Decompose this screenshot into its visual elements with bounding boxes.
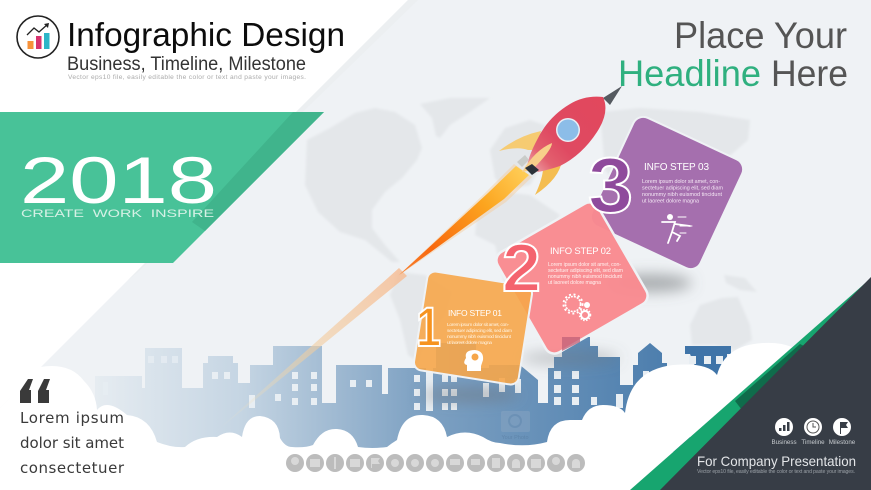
Africa <box>475 192 560 285</box>
step 01 body: Lorem ipsum dolor sit amet, con- <box>447 322 509 328</box>
lower fin <box>535 160 562 195</box>
step 02 body: sectetuer adipiscing elit, sed diam <box>548 268 623 274</box>
card: step 02 <box>493 199 651 357</box>
clouds and white foreground <box>0 343 792 490</box>
icon: milestone <box>833 418 851 436</box>
body highlight <box>522 143 552 172</box>
card: step 03 <box>587 113 747 273</box>
year: 2018 <box>20 143 217 217</box>
icon: logo chart <box>17 16 59 58</box>
nose spike <box>603 86 622 105</box>
nozzle <box>525 164 539 175</box>
presentation heading: For Company Presentation <box>697 453 856 469</box>
icon labels: Business <box>771 439 797 446</box>
dark corner panel <box>660 277 871 490</box>
step 03 body: ut laoreet dolore magna <box>642 198 699 204</box>
icon labels: Milestone <box>829 439 856 446</box>
quote text <box>20 409 125 477</box>
upper fin <box>499 131 541 151</box>
step number 1: 1 <box>416 295 441 358</box>
presentation note: Vector eps10 file, easily editable the color or text and paste your images. <box>697 469 855 475</box>
North America <box>305 108 422 262</box>
icon: quotation mark <box>20 379 50 403</box>
quote text: consectetuer <box>20 459 125 477</box>
flame glow <box>398 164 532 276</box>
tagline: CREATE WORK INSPIRE <box>21 208 214 220</box>
building overlap tint <box>562 337 580 351</box>
banner fold <box>192 112 324 231</box>
South America <box>390 272 452 362</box>
green banner <box>0 112 324 263</box>
camera photo placeholder <box>501 411 530 441</box>
step 02 body: Lorem ipsum dolor sit amet, con- <box>548 262 621 268</box>
headline: Here <box>771 53 848 94</box>
windows <box>103 356 723 411</box>
Europe <box>490 120 545 190</box>
Greenland <box>420 98 490 138</box>
body <box>527 97 605 172</box>
icon: gears <box>564 294 590 320</box>
fold shading <box>128 0 418 280</box>
headline: Headline <box>618 53 761 94</box>
Asia <box>600 108 750 195</box>
icon: business <box>775 418 793 436</box>
far right building <box>685 346 731 378</box>
band shadow <box>735 344 806 410</box>
rocket <box>398 86 622 276</box>
step 01 heading: INFO STEP 01 <box>448 308 502 318</box>
step 03 body: Lorem ipsum dolor sit amet, con- <box>642 179 720 185</box>
step 02 body: nonummy nibh euismod tincidunt <box>548 274 623 280</box>
Indonesia <box>724 275 757 292</box>
step number 2: 2 <box>502 230 541 306</box>
headline <box>618 15 848 94</box>
icon labels: Timeline <box>801 439 825 446</box>
step 03 body: nonummy nibh euismod tincidunt <box>642 192 722 198</box>
step 03 body <box>642 179 724 204</box>
step 01 body <box>447 322 512 346</box>
step number 3: 3 <box>588 141 633 229</box>
step 02 body <box>548 262 623 286</box>
Australia <box>690 297 752 350</box>
quote text: dolor sit amet <box>20 434 124 452</box>
step 01 body: nonummy nibh euismod tincidunt <box>447 334 512 340</box>
title: Infographic Design <box>67 16 345 53</box>
headline: Place Your <box>674 15 847 56</box>
step 03 body: sectetuer adipiscing elit, sed diam <box>642 186 724 192</box>
icon labels <box>771 439 856 446</box>
rocket exhaust trail <box>212 268 407 435</box>
subtitle: Business, Timeline, Milestone <box>67 54 306 75</box>
icon: timeline <box>804 418 822 436</box>
card shadows <box>420 274 692 402</box>
flame <box>399 166 529 275</box>
step 03 heading: INFO STEP 03 <box>644 162 709 173</box>
city skyline <box>95 337 731 452</box>
green diagonal band <box>630 278 871 490</box>
photo caption: Your Photo <box>501 435 529 441</box>
window <box>556 118 580 142</box>
step 01 body: ut laoreet dolore magna <box>447 340 492 346</box>
grey icon row <box>286 454 585 472</box>
quote text: Lorem ipsum <box>20 409 124 427</box>
step 01 body: sectetuer adipiscing elit, sed diam <box>447 328 512 334</box>
icon: running person <box>662 214 692 243</box>
title note: Vector eps10 file, easily editable the color or text and paste your images. <box>68 74 306 81</box>
world map <box>305 98 757 362</box>
step 02 heading: INFO STEP 02 <box>550 246 611 257</box>
step 02 body: ut laoreet dolore magna <box>548 280 601 286</box>
icon: head with idea <box>464 350 483 371</box>
card: step 01 <box>413 270 533 386</box>
